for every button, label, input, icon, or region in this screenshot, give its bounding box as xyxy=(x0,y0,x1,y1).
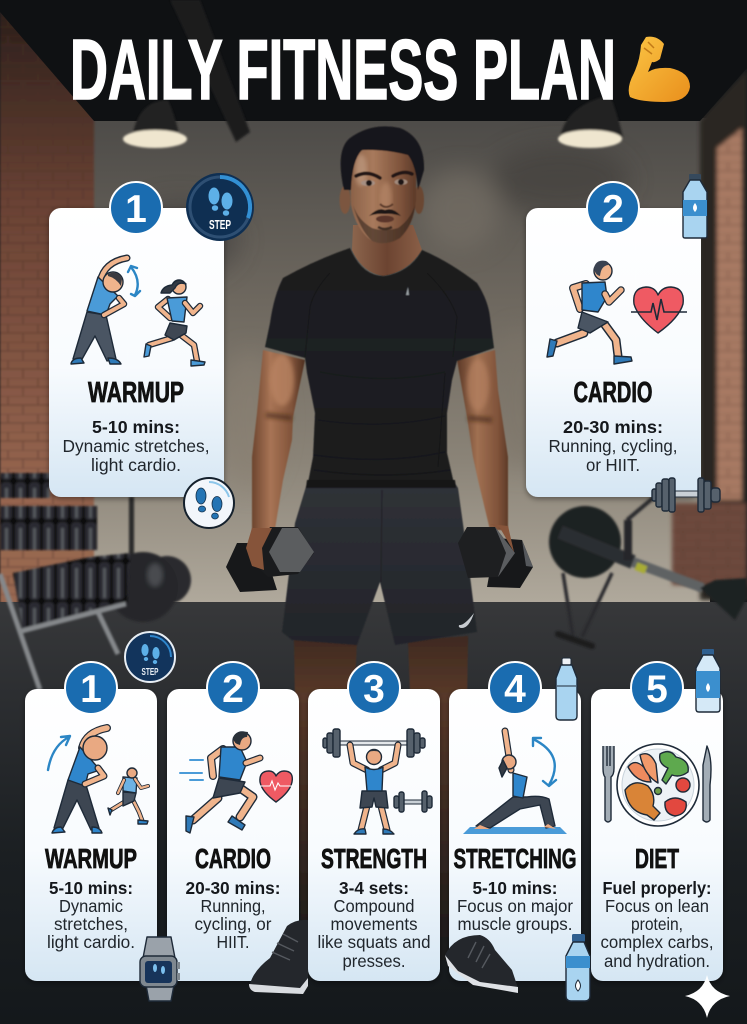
icon: heart xyxy=(260,771,293,802)
icon: flexed bicep emoji xyxy=(629,37,690,102)
card text xyxy=(318,878,430,971)
dumbbell rack xyxy=(0,473,130,690)
card text: 5-10 mins: xyxy=(92,417,180,437)
moustache and mouth xyxy=(369,209,401,216)
floor xyxy=(0,602,747,1024)
icon: sparkle xyxy=(685,975,730,1018)
card text: Compound xyxy=(334,896,414,916)
card text xyxy=(47,878,135,952)
hair xyxy=(341,126,424,190)
card heading: DIET xyxy=(635,843,679,874)
icon: weightlifter xyxy=(323,729,425,834)
icon: fork xyxy=(603,746,614,822)
card text: 3-4 sets: xyxy=(339,878,409,898)
icon: water bottle on diet card xyxy=(696,649,720,712)
small step label: STEP xyxy=(142,667,159,678)
eyes and brows xyxy=(356,172,412,178)
icon: yoga pose xyxy=(463,731,567,834)
arrow xyxy=(128,266,140,296)
icon: plate of food xyxy=(617,744,699,826)
badge: number 3: 3 xyxy=(363,668,385,711)
panel: cardio card xyxy=(167,689,299,981)
card text: Focus on major xyxy=(457,896,573,916)
arms xyxy=(252,350,508,535)
card text: Dynamic xyxy=(59,896,123,916)
icon: knife xyxy=(703,746,711,822)
icon: side stretch man xyxy=(71,258,140,364)
front dumbbells xyxy=(246,524,515,578)
card text: HIIT. xyxy=(216,932,250,952)
icon: smart watch xyxy=(140,937,180,1001)
icon: runner xyxy=(547,261,632,364)
card text xyxy=(600,878,714,971)
card text: Running, cycling, xyxy=(548,436,678,456)
badge: number 2 lower: 2 xyxy=(222,668,244,711)
card text: protein, xyxy=(631,914,683,934)
card text: 5-10 mins: xyxy=(472,878,558,898)
icon: footprints badge xyxy=(184,478,234,528)
card text: muscle groups. xyxy=(458,914,572,934)
icon: running man xyxy=(180,732,260,833)
right wall xyxy=(672,70,747,600)
rowing machine xyxy=(549,498,747,646)
muscle shading xyxy=(266,354,492,420)
icon: running woman xyxy=(144,280,205,366)
back dumbbells xyxy=(226,538,533,592)
badge: number 2 lower xyxy=(207,662,259,714)
badge: number 3 xyxy=(348,662,400,714)
panel: diet card xyxy=(591,689,723,981)
badge: number 5 xyxy=(631,662,683,714)
card heading: STRETCHING xyxy=(454,843,576,874)
panel: warmup card xyxy=(25,689,157,981)
card text: 20-30 mins: xyxy=(186,878,280,898)
badge: number 1 lower xyxy=(65,662,117,714)
icon: water bottle at bottom xyxy=(566,934,590,1001)
panel: strength card xyxy=(308,689,440,981)
card text: and hydration. xyxy=(604,951,710,971)
card text: cycling, or xyxy=(194,914,272,934)
footprints xyxy=(208,188,232,216)
badge: number 4: 4 xyxy=(504,668,526,711)
card text xyxy=(457,878,573,934)
panel: stretching card xyxy=(449,689,581,981)
stubble xyxy=(353,205,415,243)
nose xyxy=(380,204,393,207)
card text: light cardio. xyxy=(91,455,181,475)
card heading: CARDIO xyxy=(574,377,652,409)
swoosh logo xyxy=(459,613,474,628)
badge: number 1: 1 xyxy=(125,188,147,231)
panel: top warmup card xyxy=(49,208,224,497)
card text: complex carbs, xyxy=(600,932,714,952)
concrete wall xyxy=(90,118,710,604)
badge: small step counter xyxy=(125,632,175,682)
ceiling beam xyxy=(170,0,250,142)
left brick wall xyxy=(0,10,94,650)
sweat drops xyxy=(406,287,409,295)
icon: water bottle xyxy=(683,174,707,238)
shirt xyxy=(265,248,494,488)
card text: Running, xyxy=(200,896,266,916)
icon: barbell xyxy=(652,478,720,512)
person holding dumbbells xyxy=(226,126,533,960)
card text: like squats and xyxy=(318,932,430,952)
badge: step counter xyxy=(186,173,254,241)
card text: presses. xyxy=(342,951,406,971)
icon: dumbbell xyxy=(394,791,432,812)
shorts xyxy=(282,480,477,645)
icon: side stretch with runner xyxy=(48,728,148,833)
ceiling xyxy=(0,0,747,121)
card text: Fuel properly: xyxy=(602,878,712,898)
card text xyxy=(548,417,678,475)
fingers xyxy=(246,528,272,570)
card text: stretches, xyxy=(54,914,128,934)
wall mottling xyxy=(120,145,630,490)
panel: top cardio card xyxy=(526,208,701,497)
icon: running shoe left xyxy=(249,920,308,994)
card text: or HIIT. xyxy=(586,455,640,475)
step label: STEP xyxy=(209,218,231,232)
exercise balls xyxy=(108,497,191,622)
head xyxy=(340,126,424,243)
lamp right xyxy=(558,95,623,148)
card text: 20-30 mins: xyxy=(563,417,663,437)
card text: movements xyxy=(330,914,418,934)
lamp left xyxy=(123,100,187,148)
card heading: CARDIO xyxy=(195,843,271,874)
card text xyxy=(62,417,210,475)
badge: number 1 lower: 1 xyxy=(80,668,102,711)
neck xyxy=(352,225,422,276)
card text: Dynamic stretches, xyxy=(62,436,210,456)
badge: number 2 xyxy=(587,182,639,234)
icon: heart with pulse xyxy=(631,287,687,333)
badge: number 4 xyxy=(489,662,541,714)
card heading: STRENGTH xyxy=(321,843,427,874)
badge: number 2: 2 xyxy=(602,188,624,231)
card text: 5-10 mins: xyxy=(49,878,133,898)
legs xyxy=(294,636,468,960)
icon: sports bottle on stretching card xyxy=(556,658,577,720)
badge: number 1 xyxy=(110,182,162,234)
small runner xyxy=(108,768,148,824)
icon: running shoe right xyxy=(445,935,518,993)
card text xyxy=(186,878,280,952)
badge: number 5: 5 xyxy=(646,668,668,711)
card text: Focus on lean xyxy=(605,896,709,916)
card heading: WARMUP xyxy=(88,377,184,409)
card text: light cardio. xyxy=(47,932,135,952)
card heading: WARMUP xyxy=(45,843,137,874)
